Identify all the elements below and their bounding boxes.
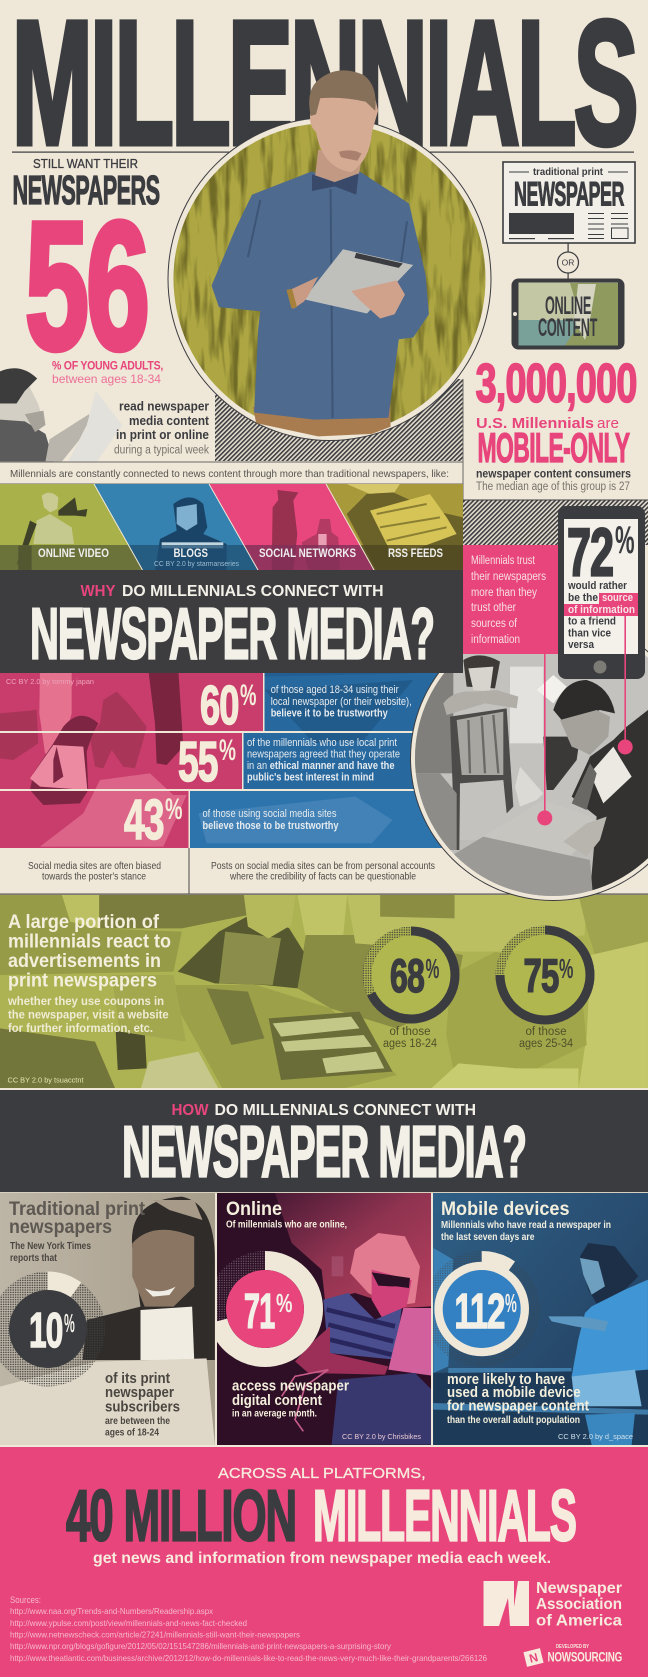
panel: traditional print newspapers: reports that <box>10 1253 58 1264</box>
caveat notes <box>0 848 648 895</box>
callout: trust statement: more than they <box>471 587 537 599</box>
advertisement heading: print newspapers <box>8 970 157 992</box>
caveat notes: Social media sites are often biased <box>28 861 161 872</box>
stat text: digital content: access newspaper <box>232 1378 349 1395</box>
blue row panels <box>264 673 474 731</box>
stat: 3,000,000 mobile-only: are <box>597 415 619 432</box>
stat text: print subscribers: ages of 18-24 <box>105 1428 159 1439</box>
caveat notes: where the credibility of facts can be questionable <box>229 872 416 882</box>
phone: 72 percent <box>558 506 645 679</box>
left foliage <box>0 1028 116 1090</box>
panel: trust statistics rows <box>0 673 442 848</box>
stat text: 55 percent: of the millennials who use local print <box>247 737 397 749</box>
photo: woman among newspapers <box>0 895 648 1090</box>
phone: 72 percent: to a friend <box>568 616 616 628</box>
jeans <box>332 1373 432 1445</box>
stat: 60 percent: 60 <box>200 674 238 736</box>
stat text: 55 percent: in an ethical manner and have the <box>247 760 394 772</box>
stat text: digital content: in an average month. <box>232 1408 317 1420</box>
stat: 43 percent: 43 <box>124 788 164 852</box>
sources: Sources: <box>10 1595 41 1606</box>
phone: 72 percent: versa <box>568 639 595 651</box>
stat text: 55 percent <box>247 737 400 784</box>
sources: http://www.npr.org/blogs/gofigure/2012/05/02/151547286/millennials-and-print-newspapers-a-surprising-story <box>10 1641 392 1651</box>
panel: mobile devices: the last seven days are <box>441 1232 535 1243</box>
strip: blogs <box>94 484 258 570</box>
arm <box>295 1326 388 1375</box>
stat: 55 percent: 55 <box>178 730 218 794</box>
callout: trust statement: sources of <box>471 618 518 630</box>
panel: advertisement reactions <box>0 895 648 1090</box>
how section header: DO MILLENNIALS CONNECT WITH <box>214 1102 476 1119</box>
bow tie <box>312 174 359 195</box>
strip: social networks <box>210 484 374 570</box>
stat text: 60 percent <box>271 684 412 720</box>
woman and chair <box>463 655 500 688</box>
donut chart: 68 percent: 68 <box>390 949 424 1002</box>
advertisement subtext: for further information, etc. <box>8 1021 153 1035</box>
phone: 72 percent: be the <box>568 592 598 604</box>
advertisement subtext: whether they use coupons in <box>7 994 164 1008</box>
hatch panel behind portrait <box>215 379 463 461</box>
callout: trust statement: information <box>471 634 520 646</box>
donut chart: 68 percent: of those <box>390 1026 430 1038</box>
icon: tablet online content <box>512 278 624 350</box>
how section header: HOW <box>172 1102 209 1119</box>
strapline: still want their newspapers: NEWSPAPERS <box>12 167 160 213</box>
strip: online video <box>0 484 150 574</box>
icon: or connector <box>558 243 578 279</box>
category strip <box>0 484 467 574</box>
sources <box>10 1595 487 1663</box>
donut chart: 71 percent: 71 <box>244 1285 274 1339</box>
stat: 60 percent: % <box>240 679 256 712</box>
category strip: RSS FEEDS <box>388 548 443 560</box>
sources: http://www.netnewscheck.com/article/27241/millennials-still-want-their-newspapers <box>10 1630 300 1640</box>
caveat notes: towards the poster's stance <box>42 872 146 882</box>
photo circle: couple reading newspaper <box>410 648 648 901</box>
hair <box>309 70 376 116</box>
panel: mobile devices <box>424 1193 648 1445</box>
logo: newspaper association of america: of America <box>536 1613 622 1630</box>
shirt <box>212 171 429 420</box>
advertisement subtext <box>7 994 169 1035</box>
read newspaper text <box>114 400 210 456</box>
read newspaper text: during a typical week <box>114 444 209 456</box>
label band <box>0 545 142 570</box>
read newspaper text: in print or online <box>116 428 209 442</box>
hands <box>291 277 318 309</box>
sources: http://www.theatlantic.com/business/archive/2012/12/how-do-millennials-like-to-read-the-news-very-much-like-their-grandparents/266126 <box>10 1653 487 1663</box>
photo: young man reading newspaper <box>0 368 122 461</box>
sources: http://www.ypulse.com/post/view/millennials-and-news-fact-checked <box>10 1618 247 1628</box>
panel title: traditional print newspapers: newspapers <box>9 1217 112 1238</box>
stat: 43 percent: % <box>165 793 182 826</box>
panel: online: CC BY 2.0 by Chrisbikes <box>342 1432 421 1441</box>
icon: traditional print newspaper <box>503 162 635 243</box>
stat text: print subscribers: of its print <box>105 1370 170 1387</box>
stat text: 55 percent: newspapers agreed that they operate <box>247 749 400 761</box>
donut chart: 75 percent: of those <box>526 1026 566 1038</box>
hatch panel top right <box>463 500 648 545</box>
icon: or connector: OR <box>562 258 574 268</box>
panel title: traditional print newspapers: Traditional print <box>9 1199 146 1220</box>
advertisement heading: millennials react to <box>8 930 171 952</box>
stat text: print subscribers: subscribers <box>105 1399 180 1416</box>
phone: 72 percent: of information <box>568 604 635 616</box>
stat: 56 percent: 56 <box>25 184 147 388</box>
caveat notes: Posts on social media sites can be from personal accounts <box>211 861 435 872</box>
donut chart: 68 percent: ages 18-24 <box>383 1038 438 1050</box>
row separators <box>0 731 480 733</box>
tablet <box>304 249 413 314</box>
category strip: ONLINE VIDEO <box>38 548 109 560</box>
stat: 55 percent: % <box>219 734 236 767</box>
title rule <box>12 152 634 153</box>
divider sentence: Millennials are constantly connected to news content through more than traditional newspapers, like: <box>10 468 449 480</box>
panel: trust statistics rows: CC BY 2.0 by tommy japan <box>6 677 94 686</box>
icon: traditional print newspaper: traditional print <box>533 167 604 178</box>
stat text: 43 percent: of those using social media sites <box>202 808 337 820</box>
panel: online <box>216 1193 432 1445</box>
callout: trust statement: trust other <box>471 602 516 614</box>
stat text: digital content: digital content <box>232 1392 322 1409</box>
phone: 72 percent: source <box>602 592 633 604</box>
stat text: 60 percent: of those aged 18-34 using their <box>271 684 399 696</box>
bracelet <box>289 289 294 308</box>
photo: woman reading newspaper <box>0 1197 215 1445</box>
stat text: print subscribers <box>105 1370 180 1439</box>
portrait circle <box>168 117 492 441</box>
donut chart: 112 percent: 112 <box>454 1285 504 1339</box>
panel: footer summary <box>0 1445 648 1677</box>
torso and stripes <box>323 1293 402 1360</box>
why section header: DO MILLENNIALS CONNECT WITH <box>122 583 384 600</box>
panel: online: Of millennials who are online, <box>226 1220 347 1231</box>
panel: footer summary: ACROSS ALL PLATFORMS, <box>218 1465 426 1482</box>
donut chart: 112 percent: % <box>505 1288 517 1318</box>
callout: trust statement: their newspapers <box>471 571 546 583</box>
donut chart: 75 percent: 75 <box>524 949 559 1002</box>
stat text: print subscribers: are between the <box>105 1416 170 1427</box>
stat: 3,000,000 mobile-only <box>476 352 636 493</box>
stat: 56 percent: between ages 18-34 <box>52 372 161 386</box>
advertisement heading: A large portion of <box>8 911 159 933</box>
donut chart: 71 percent <box>216 1260 314 1358</box>
panel: mobile devices: Millennials who have read a newspaper in <box>441 1220 611 1231</box>
donut chart: 10 percent: 10 <box>29 1304 62 1358</box>
category strip: BLOGS <box>174 548 208 560</box>
why section header <box>0 570 463 675</box>
callout: trust statement: Millennials trust <box>471 555 536 567</box>
man with tablet <box>212 70 429 436</box>
icon: tablet online content: ONLINE <box>545 292 591 320</box>
donut chart: 75 percent <box>496 926 594 1050</box>
stat: 3,000,000 mobile-only: newspaper content consumers <box>476 468 631 480</box>
advertisement subtext: the newspaper, visit a website <box>8 1008 169 1022</box>
phone: 72 percent: % <box>615 519 634 562</box>
stat text: 43 percent: believe those to be trustworthy <box>202 820 338 832</box>
logo: newspaper association of america: Newspaper <box>536 1580 622 1597</box>
stat text: 55 percent: public's best interest in mind <box>247 772 374 784</box>
advertisement heading: advertisements in <box>8 950 161 972</box>
stat text: mobile likelihood: used a mobile device <box>447 1385 581 1401</box>
donut chart: 112 percent <box>424 1251 540 1367</box>
leader lines and dots <box>537 616 633 826</box>
photo: person with laptop <box>275 1193 432 1445</box>
logo: nowsourcing: N <box>528 1650 540 1666</box>
logo: newspaper association of america: Association <box>536 1596 622 1613</box>
why section header: WHY <box>80 583 116 600</box>
read newspaper text: media content <box>129 414 210 428</box>
panel: footer summary: 40 MILLION <box>66 1476 296 1557</box>
stat text: mobile likelihood: more likely to have <box>447 1372 565 1388</box>
panel: traditional print newspapers <box>0 1193 215 1445</box>
sources: http://www.naa.org/Trends-and-Numbers/Readership.aspx <box>10 1606 214 1616</box>
logo: newspaper association of america <box>484 1580 622 1630</box>
panel: advertisement reactions: CC BY 2.0 by tsuacctnt <box>8 1076 84 1085</box>
neck and head <box>315 150 364 182</box>
photo: woman using phone <box>433 1243 648 1445</box>
stat text: digital content <box>232 1378 349 1420</box>
stat text: 60 percent: local newspaper (or their website), <box>271 696 412 708</box>
stat text: print subscribers: newspaper <box>105 1384 174 1401</box>
panel: footer summary: get news and information from newspaper media each week. <box>93 1550 551 1567</box>
photo: people reading on sidewalk <box>0 670 187 847</box>
donut chart: 10 percent <box>0 1272 105 1386</box>
stat: 3,000,000 mobile-only: U.S. Millennials <box>476 415 594 432</box>
man <box>572 710 648 893</box>
stat text: mobile likelihood: for newspaper content <box>447 1399 589 1415</box>
donut chart: 75 percent: ages 25-34 <box>519 1038 574 1050</box>
laptop <box>388 1308 432 1376</box>
strapline: still want their newspapers: STILL WANT THEIR <box>33 157 138 171</box>
logo: nowsourcing: NOWSOURCING <box>548 1650 622 1665</box>
stat: 56 percent: % OF YOUNG ADULTS, <box>52 358 163 372</box>
how section header <box>0 1088 648 1194</box>
callout: trust statement <box>463 545 559 654</box>
advertisement heading <box>8 911 171 992</box>
trousers <box>253 404 390 436</box>
stat text: mobile likelihood: than the overall adult population <box>447 1415 580 1426</box>
hair and face <box>350 1233 420 1306</box>
donut chart: 10 percent: % <box>64 1308 75 1338</box>
phone: 72 percent: than vice <box>568 628 611 640</box>
panel: mobile devices: CC BY 2.0 by d_space <box>558 1432 633 1441</box>
logo: nowsourcing <box>523 1644 622 1667</box>
phone: 72 percent: 72 <box>567 515 613 591</box>
logo: nowsourcing: DEVELOPED BY <box>556 1644 590 1650</box>
stat: 3,000,000 mobile-only: The median age of this group is 27 <box>476 481 630 493</box>
panel title: traditional print newspapers <box>9 1199 146 1238</box>
panel title: mobile devices: Mobile devices <box>441 1199 570 1220</box>
stat text: mobile likelihood <box>447 1372 589 1426</box>
category strip: CC BY 2.0 by starmanseries <box>154 559 239 568</box>
woman <box>178 912 304 988</box>
donut chart: 68 percent <box>363 927 459 1050</box>
newspaper and blanket <box>500 840 576 856</box>
category strip: SOCIAL NETWORKS <box>259 548 356 560</box>
phone: 72 percent: would rather <box>567 580 628 592</box>
stat text: 60 percent: believe it to be trustworthy <box>271 708 388 720</box>
stat text: 43 percent <box>202 808 338 832</box>
strip: rss feeds <box>326 484 463 570</box>
panel title: online: Online <box>226 1199 282 1220</box>
donut chart: 71 percent: % <box>276 1288 292 1318</box>
strapline: still want their newspapers <box>12 157 160 213</box>
panel: traditional print newspapers: The New York Times <box>10 1241 91 1252</box>
donut chart: 75 percent: % <box>559 953 573 984</box>
donut chart: 68 percent: % <box>426 953 439 984</box>
read newspaper text: read newspaper <box>119 400 209 414</box>
magazines <box>176 985 396 1088</box>
